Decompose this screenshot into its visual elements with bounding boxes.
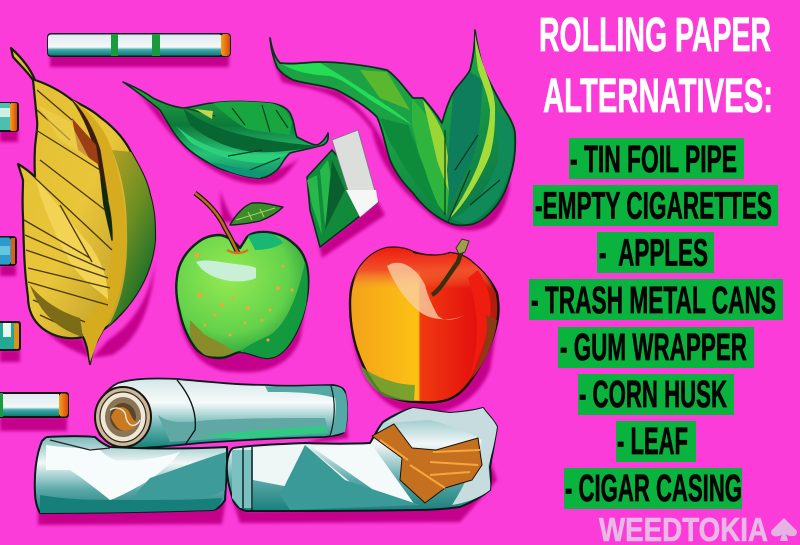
icon: folded green leaf with paper <box>307 130 378 247</box>
list item: leaf: - LEAF <box>617 421 688 463</box>
list item: apples <box>597 232 714 274</box>
heading <box>539 9 773 123</box>
icon: green leaf right <box>270 30 515 225</box>
list item: leaf <box>616 421 696 463</box>
list item: apples: - APPLES <box>599 232 708 274</box>
icon: cigarette top <box>47 33 231 57</box>
icon: cropped cigarette 3 <box>0 321 21 351</box>
list item: corn husk <box>578 374 734 416</box>
icon: cropped cigarette 1 <box>0 102 19 132</box>
icon: green apple <box>176 193 308 358</box>
icon: red and yellow apple <box>350 239 498 403</box>
icon: cropped cigarette 4 <box>0 392 69 418</box>
shadows <box>0 55 510 525</box>
icon: yellow leaf <box>11 48 155 364</box>
icon: tin foil can top <box>95 378 347 448</box>
icon: cropped cigarette 2 <box>0 236 17 266</box>
icon: green leaf middle <box>123 82 328 178</box>
icon: tin foil can right with tobacco <box>227 408 497 511</box>
icon: tin foil can left <box>35 436 227 513</box>
